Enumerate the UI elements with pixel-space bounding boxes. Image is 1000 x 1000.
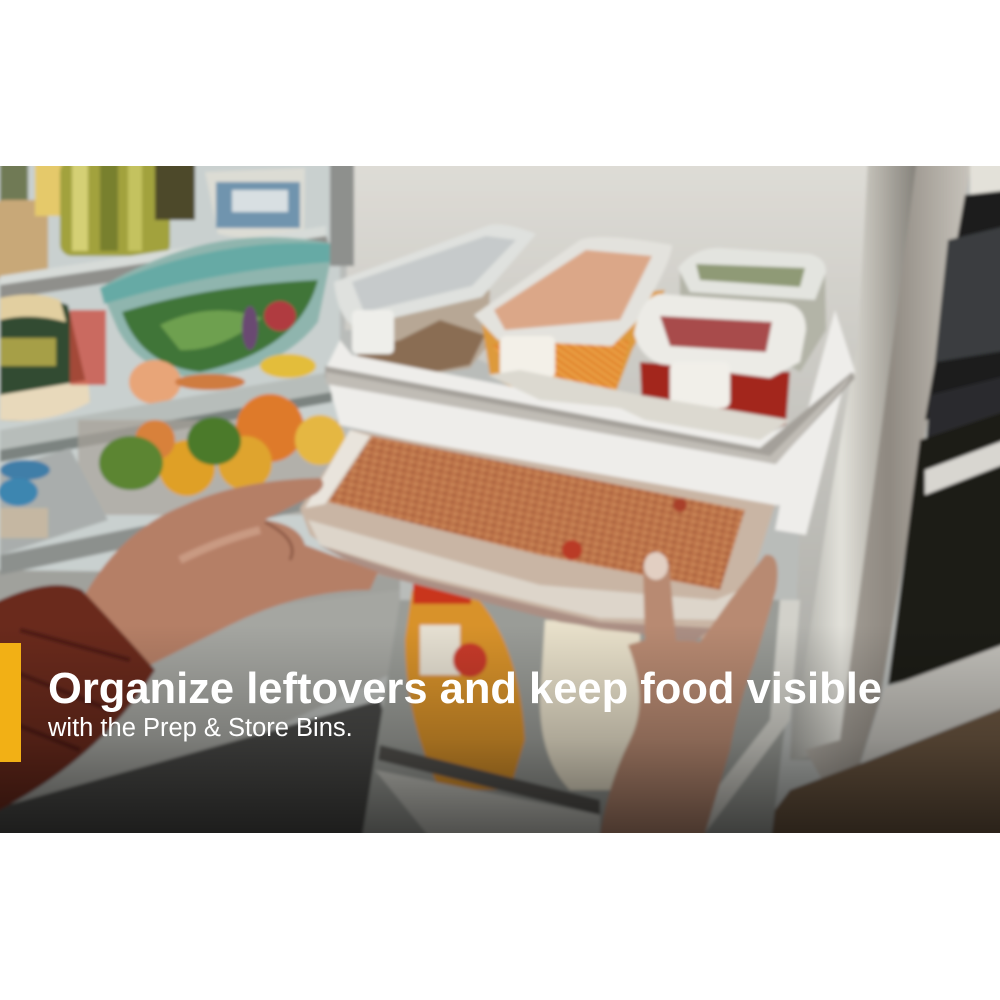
upper shelf <box>0 235 330 300</box>
left container <box>334 224 536 377</box>
headline: Organize leftovers and keep food visible <box>48 665 882 713</box>
right hand <box>598 552 778 850</box>
jar label <box>0 294 106 421</box>
right: range and floor <box>770 166 1000 833</box>
door inner wall <box>345 160 868 760</box>
citrus <box>78 394 345 515</box>
front red container <box>634 294 806 436</box>
centre container <box>474 237 672 402</box>
door edge trim <box>790 160 917 760</box>
lower door bin with bottles <box>360 584 800 850</box>
left shelves with food <box>0 160 345 575</box>
bottom vignette <box>0 625 1000 833</box>
fridge interior background <box>0 156 1000 850</box>
accent bar <box>0 643 21 762</box>
left arm and hand <box>0 478 378 815</box>
large rice container <box>300 430 775 642</box>
lower shelf <box>0 372 332 456</box>
photo: open refrigerator with Prep & Store Bins <box>0 166 1000 833</box>
subheading: with the Prep & Store Bins. <box>48 714 353 742</box>
rear containers on top bin <box>334 224 826 436</box>
top shelf jars <box>0 160 305 280</box>
salad bowl <box>100 237 334 378</box>
lower left bin <box>0 448 330 575</box>
back right container <box>678 248 826 372</box>
white bin holder <box>325 310 855 535</box>
